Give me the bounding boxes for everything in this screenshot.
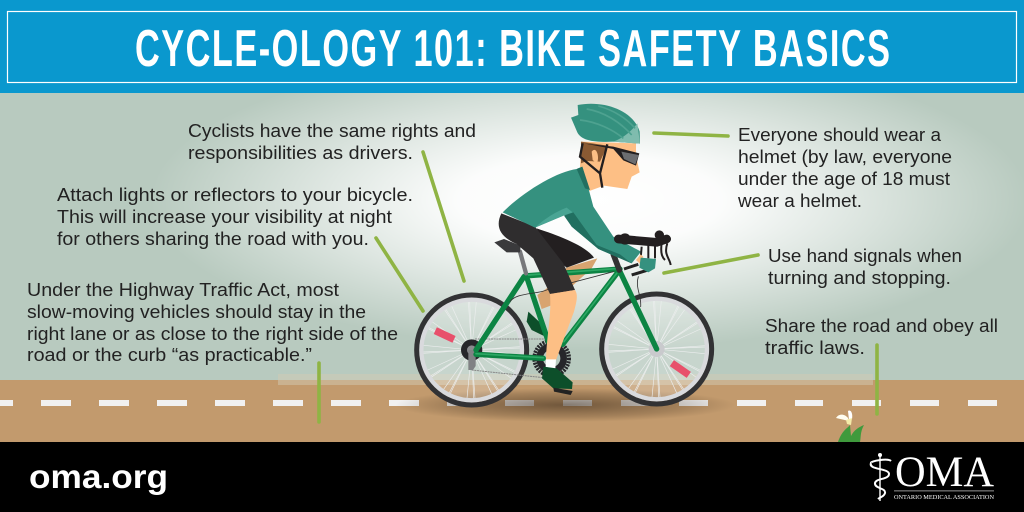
text: hand signals: Use hand signals when	[768, 245, 962, 266]
text: same rights: Cyclists have the same rights and	[188, 120, 476, 141]
helmet straps	[580, 143, 607, 188]
text: lights or reflectors: for others sharing the road with you.	[57, 228, 369, 249]
icon: grass	[838, 425, 864, 442]
neck and face	[580, 142, 640, 191]
logo rule	[894, 490, 994, 492]
association name: ONTARIO MEDICAL ASSOCIATION	[894, 495, 995, 501]
sunglasses	[585, 144, 639, 166]
callout line: hand signals	[664, 255, 758, 273]
header banner	[0, 0, 1024, 93]
text: highway traffic act	[27, 279, 398, 365]
background: sky	[0, 93, 1024, 383]
title: CYCLE-OLOGY 101: BIKE SAFETY BASICS	[135, 20, 890, 78]
text: lights or reflectors: This will increase your visibility at night	[57, 206, 392, 227]
callout line: highway act	[317, 363, 321, 422]
bicycle shadow	[395, 388, 735, 422]
background: glow behind cyclist	[100, 93, 1024, 353]
text: hand signals	[768, 245, 962, 288]
rod of Asclepius	[871, 453, 891, 501]
handlebars and brake levers	[618, 230, 671, 275]
text: same rights	[188, 120, 476, 163]
pedal	[553, 388, 573, 395]
text: share the road	[765, 315, 998, 358]
footer url: oma.org	[29, 458, 168, 495]
callout line: lights	[376, 238, 423, 311]
callout line: rights	[423, 152, 464, 281]
hair and ear	[581, 142, 607, 163]
text: highway traffic act: road or the curb “as practicable.”	[27, 344, 312, 365]
text: share the road: Share the road and obey all	[765, 315, 998, 336]
helmet	[571, 104, 640, 144]
shorts	[499, 213, 594, 294]
footer bar	[0, 442, 1024, 512]
text: share the road: traffic laws.	[765, 337, 865, 358]
text: lights or reflectors	[57, 184, 413, 249]
rear wheel	[406, 284, 538, 416]
chain and crankset	[461, 339, 569, 378]
text: helmet	[737, 124, 952, 211]
icon: butterfly	[836, 411, 852, 425]
callout line: helmet	[654, 133, 728, 136]
OMA wordmark: OMA	[895, 449, 994, 496]
text: helmet: under the age of 18 must	[738, 168, 950, 189]
callout line: share the road	[875, 345, 879, 414]
road dashed centre line	[0, 400, 997, 406]
text: highway traffic act: Under the Highway Traffic Act, most	[27, 279, 339, 300]
jersey	[503, 167, 641, 263]
road edge band	[278, 374, 873, 385]
text: highway traffic act: right lane or as close to the right side of the	[27, 323, 398, 344]
OMA logo	[871, 449, 995, 501]
text: helmet: wear a helmet.	[737, 190, 862, 211]
saddle	[494, 239, 521, 252]
near leg	[546, 290, 577, 360]
text: helmet: helmet (by law, everyone	[738, 146, 952, 167]
front wheel	[591, 283, 723, 415]
text: highway traffic act: slow-moving vehicles should stay in the	[27, 301, 366, 322]
sock	[546, 359, 556, 369]
text: hand signals: turning and stopping.	[768, 267, 951, 288]
far leg and shoe	[527, 258, 597, 338]
text: lights or reflectors: Attach lights or reflectors to your bicycle.	[57, 184, 413, 205]
near shoe	[542, 367, 573, 389]
road surface	[0, 380, 1024, 442]
cyclist and bicycle illustration	[406, 104, 723, 416]
text: helmet: Everyone should wear a	[738, 124, 942, 145]
text: same rights: responsibilities as drivers.	[188, 142, 413, 163]
bike frame	[476, 252, 657, 358]
glove and hand	[636, 254, 656, 272]
